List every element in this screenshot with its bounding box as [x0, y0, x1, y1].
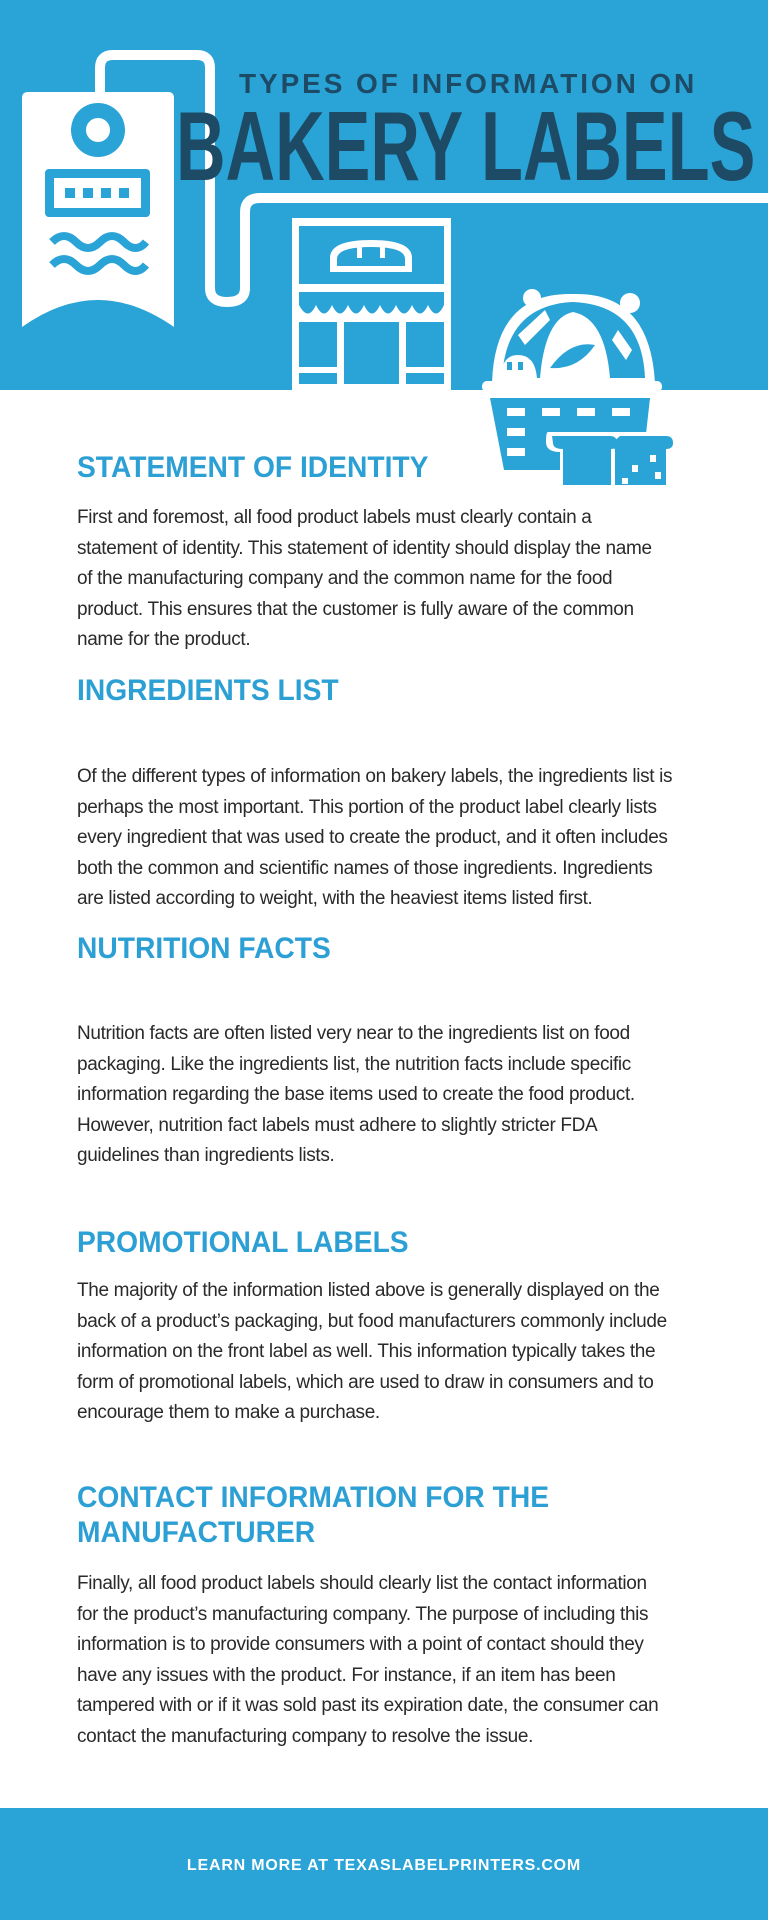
- text: nutrition facts: However, nutrition fact labels must adhere to slightly stricter FDA: [77, 1114, 597, 1136]
- footer text: LEARN MORE AT TEXASLABELPRINTERS.COM: [187, 1857, 581, 1874]
- text: statement of identity: name for the product.: [77, 629, 250, 650]
- heading: ingredients list: INGREDIENTS LIST: [77, 674, 339, 707]
- text: promotional labels: form of promotional labels, which are used to draw in consumers and to: [77, 1372, 653, 1392]
- title: main: BAKERY LABELS: [176, 91, 755, 201]
- text: contact information: [77, 1573, 658, 1746]
- text: ingredients list: every ingredient that was used to create the product, and it often includes: [77, 827, 668, 848]
- text: nutrition facts: Nutrition facts are often listed very near to the ingredients list on food: [77, 1023, 630, 1044]
- text: statement of identity: of the manufacturing company and the common name for the food: [77, 568, 612, 589]
- text: contact information: have any issues with the product. For instance, if an item has been: [77, 1664, 615, 1686]
- text: promotional labels: back of a product’s packaging, but food manufacturers commonly include: [77, 1310, 667, 1332]
- heading: contact information: CONTACT INFORMATION FOR THE: [77, 1481, 549, 1514]
- text: nutrition facts: information regarding the base items used to create the food product.: [77, 1084, 635, 1105]
- icon: bread basket: [482, 289, 678, 490]
- heading: contact information: MANUFACTURER: [77, 1516, 315, 1549]
- icon: bakery storefront: [292, 218, 451, 390]
- text: contact information: contact the manufacturing company to resolve the issue.: [77, 1726, 533, 1746]
- text: ingredients list: perhaps the most important. This portion of the product label clearly lists: [77, 796, 657, 818]
- text: promotional labels: encourage them to make a purchase.: [77, 1402, 380, 1423]
- heading: contact information: [77, 1481, 549, 1549]
- text: statement of identity: [77, 507, 652, 650]
- text: promotional labels: [77, 1280, 667, 1423]
- text: promotional labels: information on the front label as well. This information typically takes the: [77, 1341, 655, 1362]
- footer: [0, 1808, 768, 1920]
- text: statement of identity: First and foremost, all food product labels must clearly contain a: [77, 507, 591, 528]
- text: statement of identity: product. This ensures that the customer is fully aware of the common: [77, 598, 634, 620]
- text: nutrition facts: [77, 1023, 635, 1166]
- icon: label tag: [22, 92, 174, 327]
- text: nutrition facts: packaging. Like the ingredients list, the nutrition facts include specific: [77, 1054, 631, 1074]
- text: contact information: tampered with or if it was sold past its expiration date, the consumer can: [77, 1695, 658, 1716]
- heading: promotional labels: PROMOTIONAL LABELS: [77, 1226, 409, 1259]
- title: subtitle: TYPES OF INFORMATION ON: [239, 68, 697, 99]
- text: ingredients list: are listed according to weight, with the heaviest items listed first.: [77, 888, 592, 909]
- text: nutrition facts: guidelines than ingredients lists.: [77, 1145, 334, 1166]
- text: promotional labels: The majority of the information listed above is generally displayed on the: [77, 1280, 659, 1301]
- icon: tag string: [100, 55, 768, 302]
- text: contact information: for the product’s manufacturing company. The purpose of including this: [77, 1604, 648, 1624]
- header illustration: [22, 50, 768, 485]
- text: contact information: Finally, all food product labels should clearly list the contact information: [77, 1573, 647, 1594]
- heading: nutrition facts: NUTRITION FACTS: [77, 932, 331, 965]
- text: statement of identity: statement of identity. This statement of identity should display the name: [77, 538, 652, 558]
- header band: [0, 0, 768, 390]
- text: contact information: information is to provide consumers with a point of contact should they: [77, 1634, 644, 1655]
- text: ingredients list: both the common and scientific names of those ingredients. Ingredients: [77, 858, 652, 878]
- text: ingredients list: Of the different types of information on bakery labels, the ingredients list is: [77, 766, 672, 787]
- heading: statement of identity: STATEMENT OF IDENTITY: [77, 451, 428, 484]
- text: ingredients list: [77, 766, 672, 909]
